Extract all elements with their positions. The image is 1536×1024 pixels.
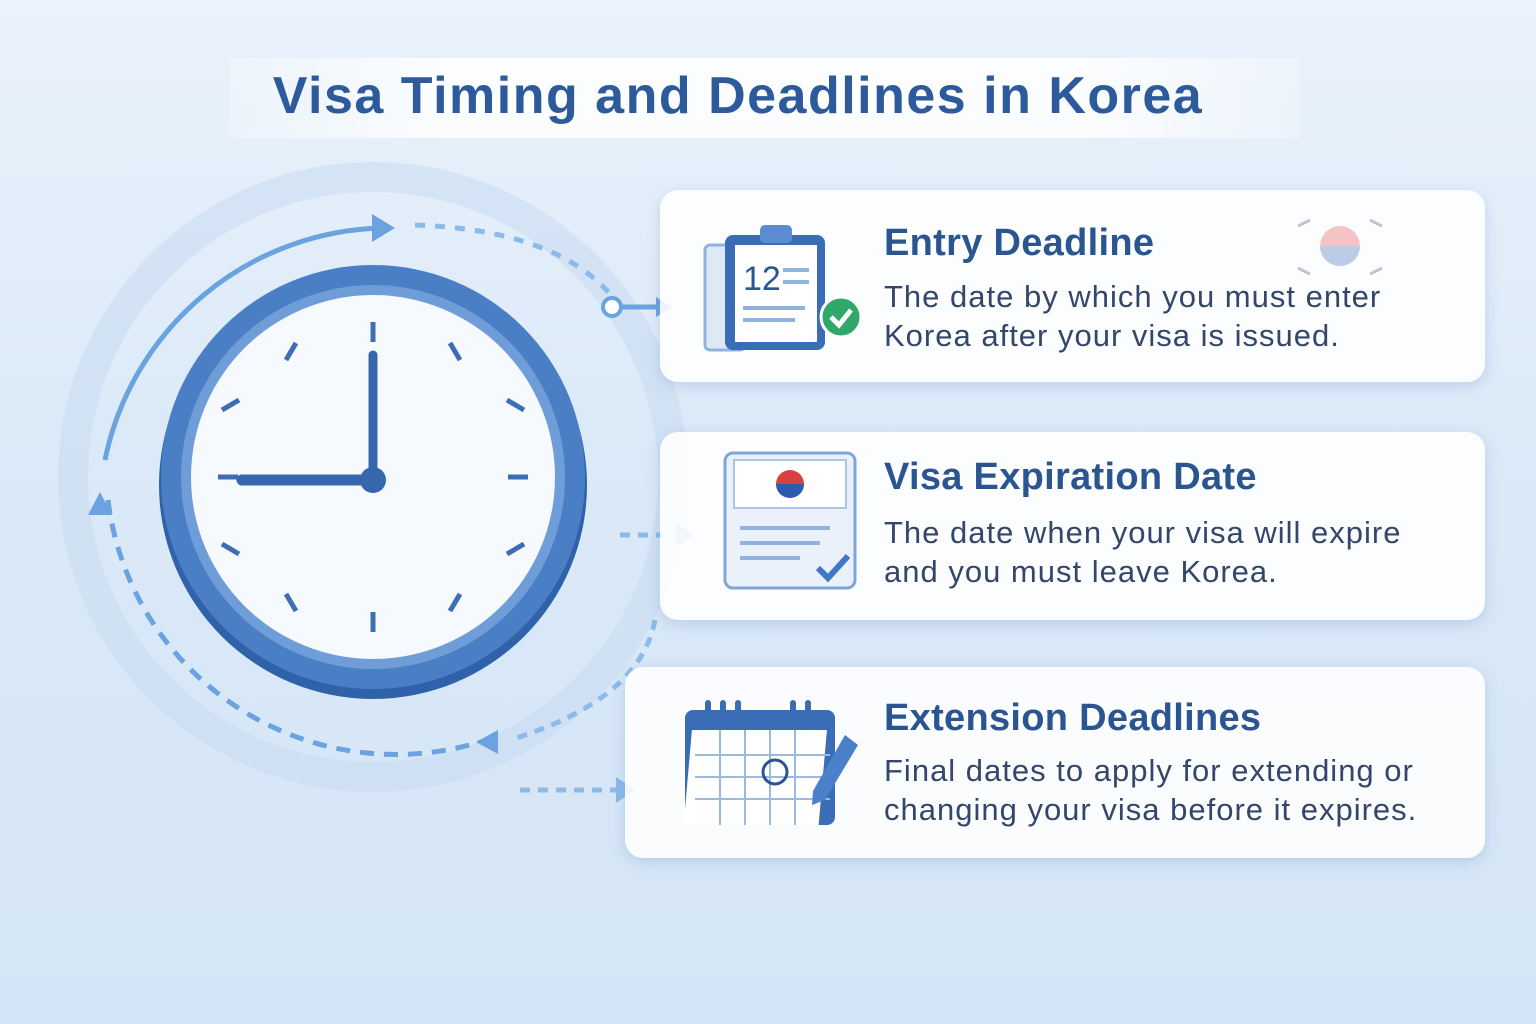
- text: Final dates to apply for extending or: [884, 753, 1414, 788]
- icon: calendar with pen: [685, 700, 858, 825]
- text: [884, 753, 1417, 827]
- title banner: [230, 58, 1300, 138]
- text: [884, 279, 1381, 353]
- heading: Entry Deadline: [884, 222, 1154, 264]
- heading: Extension Deadlines: [884, 697, 1261, 739]
- card: extension deadlines: [625, 667, 1485, 858]
- text: The date by which you must enter: [884, 279, 1381, 314]
- text: The date when your visa will expire: [884, 515, 1401, 550]
- icon: faded flag: [1297, 218, 1382, 276]
- text: Korea after your visa is issued.: [884, 318, 1340, 353]
- icon: clipboard calendar: 12: [743, 260, 781, 298]
- card: visa expiration: [660, 432, 1485, 620]
- icon: clipboard calendar: [704, 225, 860, 352]
- icon: document with flag: [724, 452, 856, 590]
- text: and you must leave Korea.: [884, 554, 1278, 589]
- text: changing your visa before it expires.: [884, 792, 1417, 827]
- text: [884, 515, 1401, 589]
- card: entry deadline: [660, 190, 1485, 382]
- heading: Visa Expiration Date: [884, 456, 1257, 498]
- clock: [159, 265, 587, 699]
- title banner: Visa Timing and Deadlines in Korea: [273, 67, 1203, 125]
